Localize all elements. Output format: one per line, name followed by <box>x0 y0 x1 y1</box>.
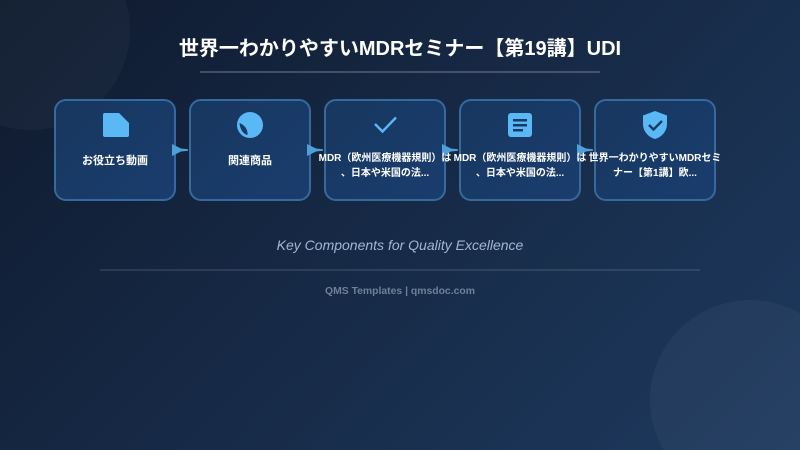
panel: card 4 <box>459 99 581 201</box>
icon: shield check <box>643 111 667 139</box>
icon: article <box>508 113 532 137</box>
arrow: card 1 to 2 <box>172 144 188 156</box>
text: card 3 label <box>319 152 451 179</box>
text: card 2 label: 関連商品 <box>228 155 272 167</box>
panel: card 2 <box>189 99 311 201</box>
text: card 3 label: 、日本や米国の法... <box>341 168 429 179</box>
icon: globe with leaf <box>237 112 263 138</box>
footer: QMS Templates | qmsdoc.com <box>325 286 475 297</box>
arrow: card 2 to 3 <box>307 144 323 156</box>
title: 世界一わかりやすいMDRセミナー【第19講】UDI <box>179 38 621 60</box>
arrow: card 4 to 5 <box>577 144 593 156</box>
decorative circle: bottom right <box>650 300 800 450</box>
text: card 1 label: お役立ち動画 <box>82 155 148 167</box>
panel: card 3 <box>324 99 446 201</box>
text: card 4 label <box>454 152 586 179</box>
text: card 4 label: 、日本や米国の法... <box>476 168 564 179</box>
panel: card 5 <box>594 99 716 201</box>
text: card 4 label: MDR（欧州医療機器規則）は <box>454 153 586 164</box>
arrow: card 3 to 4 <box>442 144 458 156</box>
title underline <box>200 71 600 73</box>
panel: card 1 <box>54 99 176 201</box>
subtitle: Key Components for Quality Excellence <box>277 237 523 253</box>
text: card 5 label: 世界一わかりやすいMDRセミ <box>589 153 721 164</box>
icon: document <box>103 113 129 137</box>
text: card 5 label <box>589 152 721 179</box>
footer divider <box>100 269 700 271</box>
icon: check mark <box>374 116 397 134</box>
decorative circle: top left <box>0 0 130 130</box>
text: card 5 label: ナー【第1講】欧... <box>613 168 697 179</box>
text: card 3 label: MDR（欧州医療機器規則）は <box>319 153 451 164</box>
